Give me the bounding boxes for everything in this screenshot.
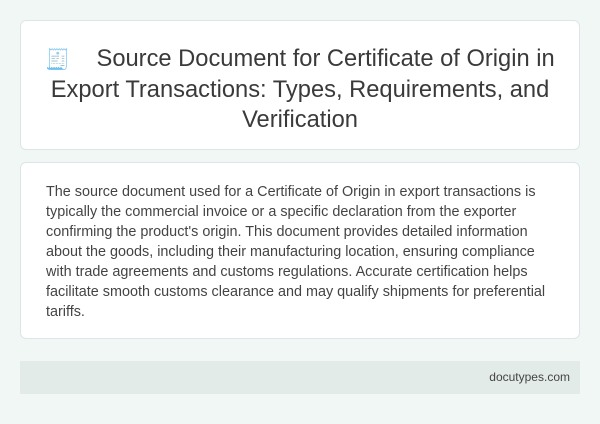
footer: docutypes.com <box>489 370 570 384</box>
description text: The source document used for a Certificate of Origin in export transactions is typically the commercial invoice or a specific declaration from the exporter confirming the product's origin. This document provides detailed information about the goods, including their manufacturing location, ensuring compliance with trade agreements and customs regulations. Accurate certification helps facilitate smooth customs clearance and may qualify shipments for preferential tariffs. <box>46 184 545 320</box>
footer <box>20 361 580 394</box>
title panel <box>20 20 580 150</box>
title: 🧾 Source Document for Certificate of Origin in Export Transactions: Types, Requirements, and Verification <box>45 46 555 133</box>
description panel <box>20 162 580 339</box>
